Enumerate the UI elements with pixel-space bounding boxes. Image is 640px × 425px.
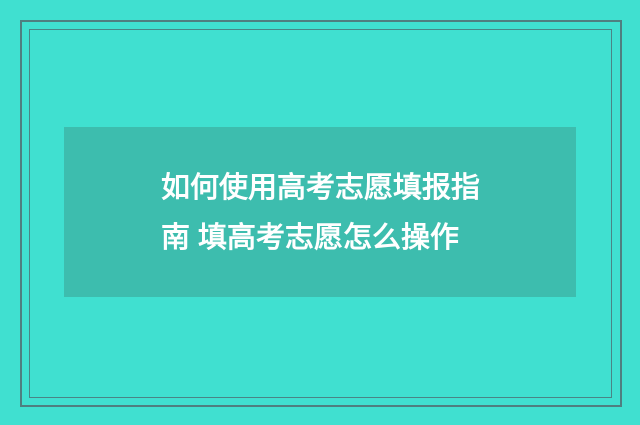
inner frame: [29, 29, 612, 398]
title: [161, 172, 480, 254]
panel: title band: [64, 127, 576, 297]
title: 南 填高考志愿怎么操作: [161, 222, 459, 254]
title: 如何使用高考志愿填报指: [161, 172, 480, 204]
